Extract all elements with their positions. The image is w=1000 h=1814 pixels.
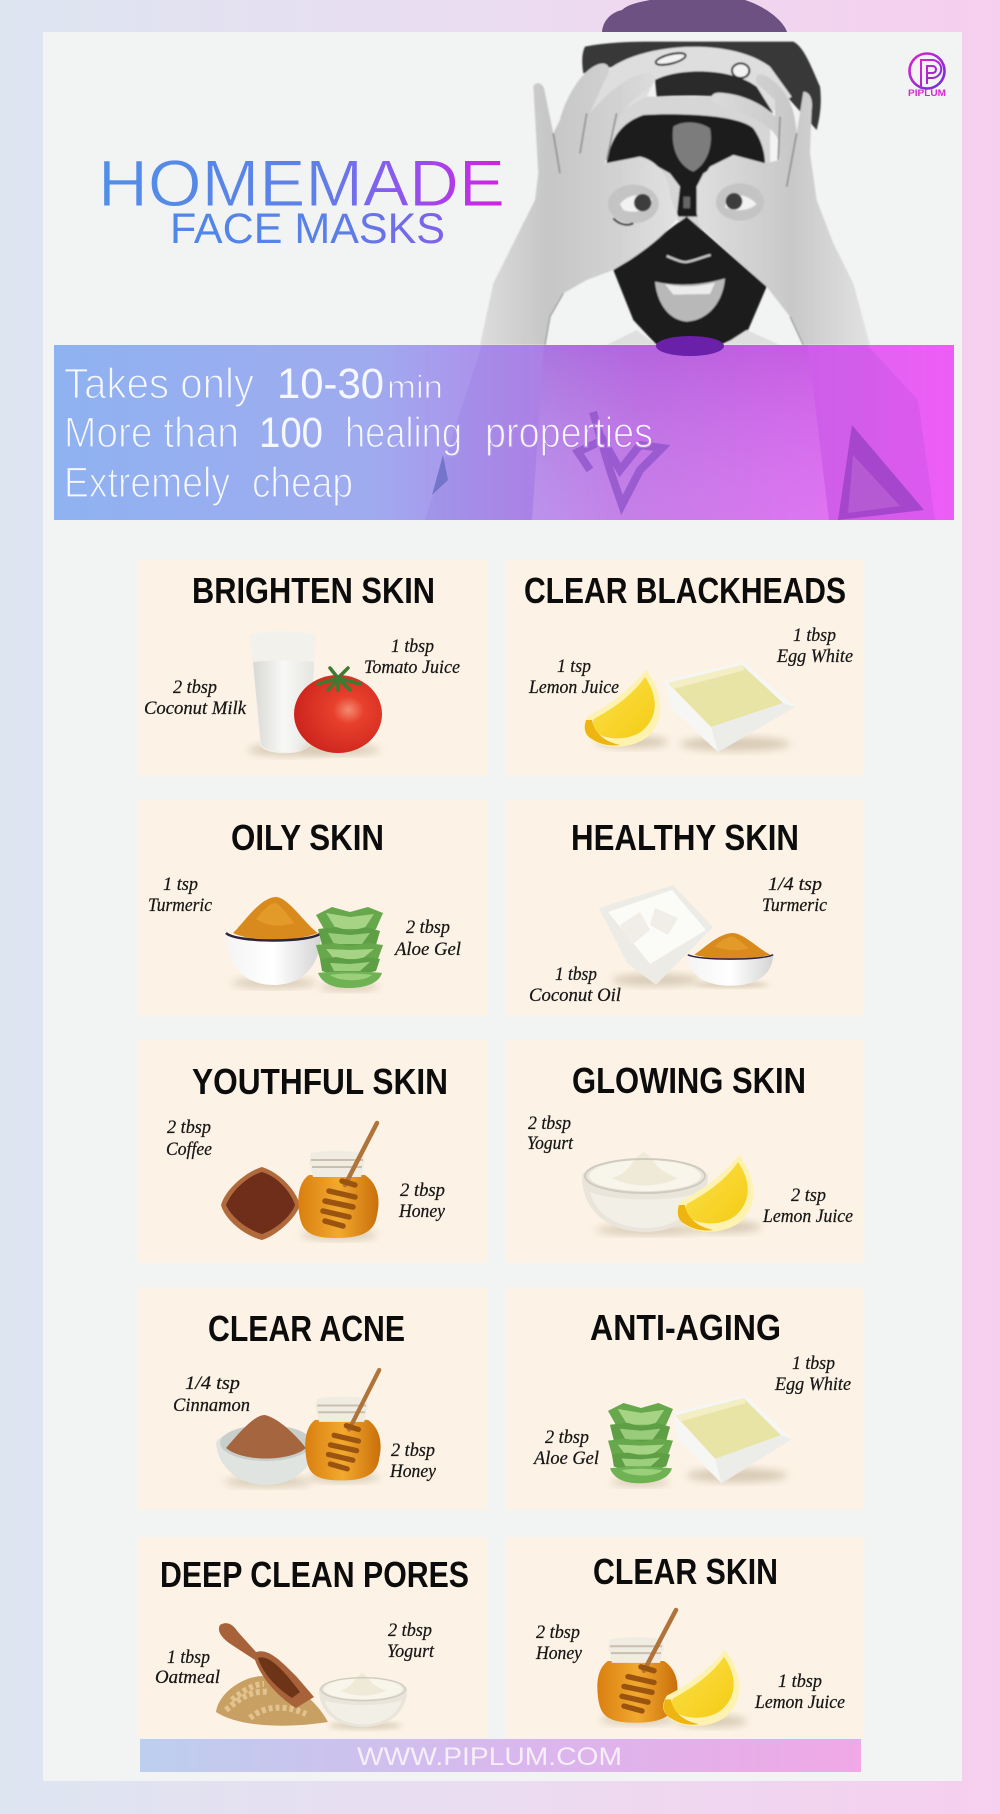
label: oatmeal [155, 1647, 220, 1688]
benefit line 2: More than [64, 409, 239, 457]
icon: honey jar [298, 1123, 378, 1240]
card: youthful skin [137, 1040, 488, 1263]
label: yogurt: Yogurt [527, 1133, 574, 1154]
card: clear acne [137, 1288, 488, 1510]
label: coconut milk: 2 tbsp [173, 677, 217, 698]
label: honey [535, 1622, 583, 1664]
label: turmeric: 1 tsp [163, 874, 198, 895]
card: clear blackheads [505, 560, 864, 776]
label: aloe gel: Aloe Gel [393, 939, 461, 960]
card: deep clean pores [137, 1537, 488, 1738]
man's hair above panel [602, 0, 787, 32]
label: lemon juice: 1 tbsp [778, 1671, 822, 1692]
card: anti-aging [505, 1288, 864, 1510]
label: aloe gel: 2 tbsp [545, 1427, 589, 1448]
icon: oats and wooden scoop [216, 1623, 328, 1726]
heading: DEEP CLEAN PORES [160, 1554, 469, 1595]
label: egg white [774, 1353, 851, 1395]
benefit line 1: Takes only [64, 360, 254, 408]
card: oily skin [137, 800, 488, 1016]
label: yogurt: 2 tbsp [528, 1113, 571, 1134]
benefit line 2: properties [485, 409, 653, 457]
benefit line 2 [64, 409, 653, 457]
banner: man's torso seen through overlay [425, 336, 935, 520]
label: yogurt [527, 1113, 574, 1154]
heading: BRIGHTEN SKIN [192, 570, 435, 611]
label: coffee: Coffee [166, 1139, 212, 1160]
icon: egg white dish [665, 662, 795, 752]
benefit line 3: Extremely [64, 459, 230, 507]
icon: tomato [294, 668, 382, 755]
footer band with website [140, 1739, 861, 1772]
icon: lemon wedge [663, 1650, 747, 1727]
label: turmeric: Turmeric [762, 895, 828, 916]
label: turmeric [148, 874, 213, 916]
label: egg white: Egg White [774, 1374, 851, 1395]
label: coconut oil: Coconut Oil [529, 985, 621, 1006]
label: coconut oil [529, 964, 621, 1006]
label: honey: 2 tbsp [400, 1180, 445, 1201]
heading: OILY SKIN [231, 817, 384, 858]
label: lemon juice [762, 1185, 853, 1227]
heading: ANTI-AGING [590, 1307, 781, 1348]
photo: man with black face mask [480, 42, 870, 345]
icon: honey jar [305, 1370, 381, 1482]
label: yogurt [387, 1620, 435, 1662]
benefit line 1: min [387, 369, 443, 405]
heading: GLOWING SKIN [572, 1060, 806, 1101]
label: lemon juice: 2 tsp [791, 1185, 826, 1206]
icon: glass of milk [248, 631, 332, 756]
label: coconut milk: Coconut Milk [144, 698, 247, 719]
label: lemon juice: Lemon Juice [528, 677, 619, 698]
card: healthy skin [505, 800, 864, 1016]
label: aloe gel: 2 tbsp [406, 917, 450, 938]
icon: yogurt bowl [319, 1673, 407, 1729]
benefit line 2: healing [345, 409, 462, 457]
icon: turmeric bowl [688, 933, 773, 988]
card: clear skin [505, 1537, 864, 1738]
benefit line 2: 100 [259, 409, 323, 457]
label: tomato juice: Tomato Juice [364, 657, 460, 678]
label: yogurt: 2 tbsp [388, 1620, 432, 1641]
label: aloe gel [393, 917, 461, 960]
icon: aloe slices [608, 1403, 673, 1486]
label: honey: 2 tbsp [391, 1440, 435, 1461]
label: honey: 2 tbsp [536, 1622, 580, 1643]
label: turmeric: Turmeric [148, 895, 213, 916]
card: brighten skin [137, 560, 488, 776]
label: honey: Honey [398, 1201, 446, 1222]
label: egg white: Egg White [776, 646, 853, 667]
label: egg white [776, 625, 853, 667]
icon: coconut oil dish [599, 885, 713, 986]
title: homemade: HOMEMADE [98, 146, 505, 220]
card: glowing skin [505, 1040, 864, 1263]
label: oatmeal: 1 tbsp [167, 1647, 210, 1668]
label: turmeric: 1/4 tsp [768, 874, 822, 895]
website address: WWW.PIPLUM.COM [357, 1743, 622, 1771]
label: tomato juice: 1 tbsp [391, 636, 434, 657]
banner with benefits [54, 336, 954, 520]
label: lemon juice [754, 1671, 845, 1713]
label: coffee [166, 1117, 212, 1160]
heading: CLEAR BLACKHEADS [524, 570, 846, 611]
icon: coffee dish [221, 1167, 300, 1240]
label: lemon juice: Lemon Juice [754, 1692, 845, 1713]
label: lemon juice: 1 tsp [557, 656, 591, 677]
label: egg white: 1 tbsp [793, 625, 836, 646]
label: honey [398, 1180, 446, 1222]
label: cinnamon: Cinnamon [173, 1395, 250, 1416]
label: tomato juice [364, 636, 460, 678]
label: coconut oil: 1 tbsp [555, 964, 597, 985]
icon: yogurt bowl [582, 1152, 708, 1235]
label: cinnamon [173, 1373, 250, 1416]
label: cinnamon: 1/4 tsp [185, 1373, 240, 1394]
icon: honey jar [597, 1610, 678, 1725]
subtitle: face masks: FACE MASKS [170, 205, 445, 253]
label: yogurt: Yogurt [387, 1641, 435, 1662]
icon: lemon wedge [584, 670, 668, 748]
benefit line 3: cheap [252, 459, 353, 507]
label: egg white: 1 tbsp [792, 1353, 835, 1374]
icon: turmeric bowl [226, 897, 321, 988]
logo: Piplum [908, 54, 946, 99]
heading: CLEAR ACNE [208, 1308, 405, 1349]
heading: YOUTHFUL SKIN [192, 1061, 448, 1102]
label: honey [389, 1440, 437, 1482]
icon: egg white dish [673, 1395, 792, 1483]
icon: aloe slices [316, 907, 383, 991]
heading: HEALTHY SKIN [571, 817, 799, 858]
benefit line 3 [64, 459, 353, 507]
label: lemon juice [528, 656, 619, 698]
label: turmeric [762, 874, 828, 916]
icon: cinnamon bowl [216, 1415, 316, 1487]
label: coffee: 2 tbsp [167, 1117, 211, 1138]
label: lemon juice: Lemon Juice [762, 1206, 853, 1227]
logo wordmark: PIPLUM [908, 88, 946, 99]
label: oatmeal: Oatmeal [155, 1667, 220, 1688]
benefit line 1: 10-30 [277, 360, 384, 408]
icon: lemon wedge [677, 1155, 761, 1233]
benefit line 1 [64, 360, 443, 408]
label: honey: Honey [389, 1461, 437, 1482]
label: aloe gel: Aloe Gel [532, 1448, 599, 1469]
label: coconut milk [144, 677, 247, 719]
label: aloe gel [532, 1427, 599, 1469]
heading: CLEAR SKIN [593, 1551, 778, 1592]
label: honey: Honey [535, 1643, 583, 1664]
